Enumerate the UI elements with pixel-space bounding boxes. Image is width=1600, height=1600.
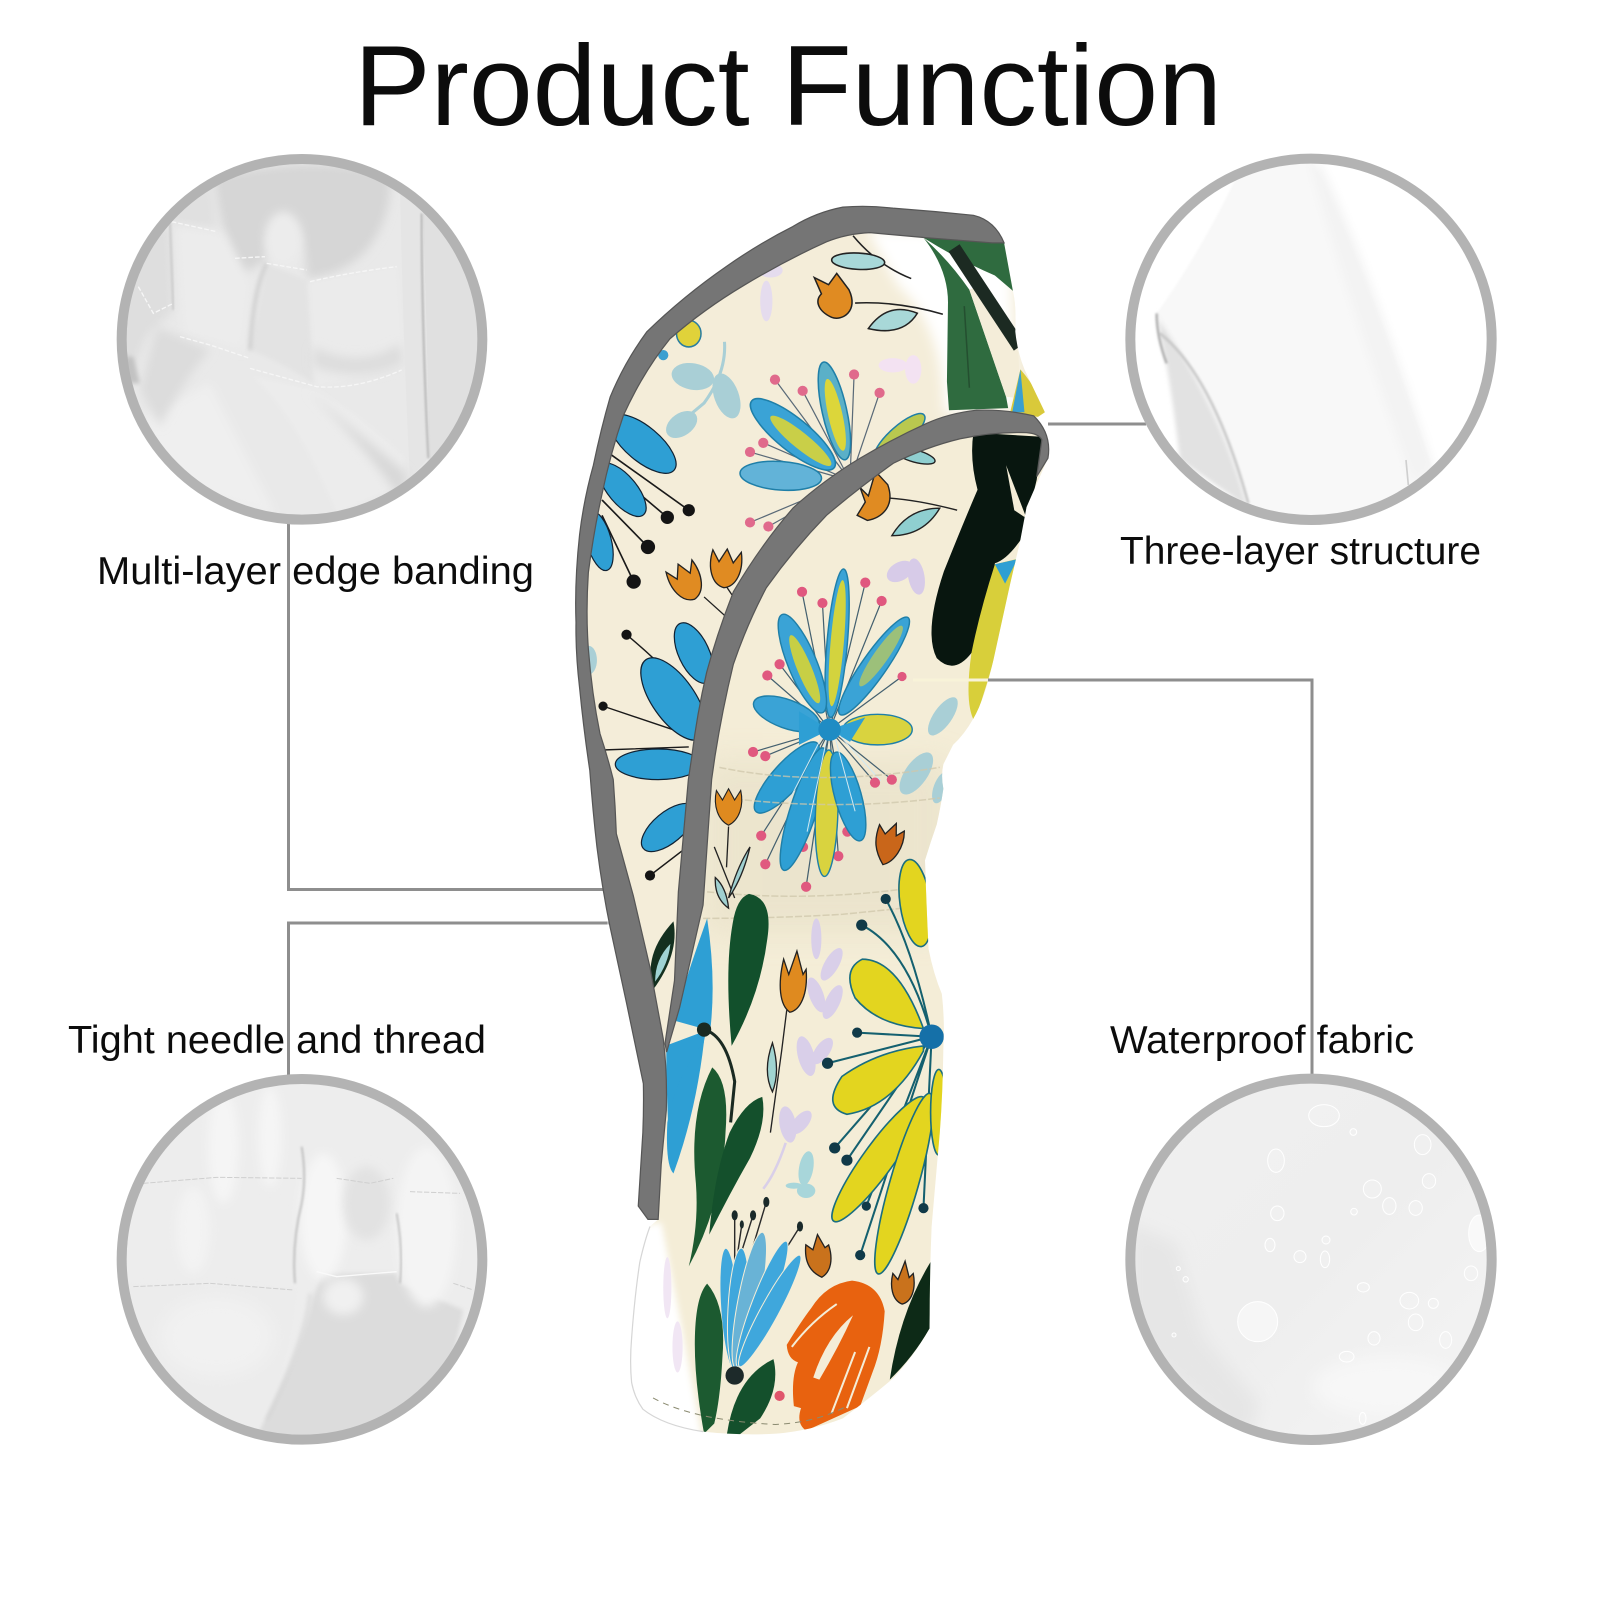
dark bottom right leaf [890,1260,932,1380]
back lower left blue flower [588,622,712,881]
connector: multi-layer edge banding [288,524,640,890]
top green leaves [923,238,1047,418]
back orange tulips [665,548,742,616]
large orange flower [774,1281,885,1431]
front grey binding [665,410,1049,1052]
pale teal heart [786,1150,816,1198]
label: waterproof fabric: Waterproof fabric [1110,1019,1414,1062]
bottom seam stitches [653,1398,847,1424]
label: tight needle and thread: Tight needle and thread [68,1019,486,1062]
top teal leaf and orange tulip [814,236,943,331]
black leaf and yellow petal [932,433,1042,721]
title: Product Function [354,23,1222,150]
label: three-layer structure: Three-layer structure [1120,530,1481,573]
stamens [750,374,880,527]
bottom small tulips [803,1233,914,1304]
blue flower left side [665,918,735,1173]
orange tulip and teal leaf [857,445,957,536]
label: multi-layer edge banding: Multi-layer edge banding [97,550,534,593]
pale blue sprig front [900,697,958,804]
detail lens: tight needle and thread [110,1070,497,1457]
connector: waterproof fabric [913,680,1312,1078]
main blue flower [745,568,918,892]
pale blue edge leaf [752,590,768,635]
bottom blue flower [717,1197,808,1385]
small tulips mid [714,789,906,908]
dark leaf lower back [651,921,675,990]
detail lens: waterproof fabric [1120,1070,1507,1457]
detail lens: multi-layer edge banding [110,150,497,537]
lilac heart sprig [763,918,847,1189]
orange tulip with teal leaf [767,951,806,1133]
bottom green leaves [695,1284,775,1437]
outer grey binding [576,206,1004,1219]
front panel of cover [650,433,1046,1434]
faint base outline [631,1227,703,1432]
connector: tight needle and thread [288,923,702,1076]
ruched stitch lines [703,767,940,918]
back panel of cover [588,234,1045,1065]
connector: three-layer structure [1048,422,1146,426]
stamens [753,583,902,887]
back top flower [739,359,931,532]
small yellow edge petal [658,320,701,360]
pale lilac drops [758,263,921,384]
back upper left blue flower [591,414,695,589]
detail lens: three-layer structure [1125,154,1497,525]
big yellow flower [821,857,947,1278]
pale blue sprig [666,342,740,438]
water droplets [1172,1105,1490,1424]
tall green leaves [689,894,769,1266]
pale lilac marks on white base [663,1257,683,1372]
lilac heart [886,558,925,595]
golf head cover product [561,194,1061,1449]
